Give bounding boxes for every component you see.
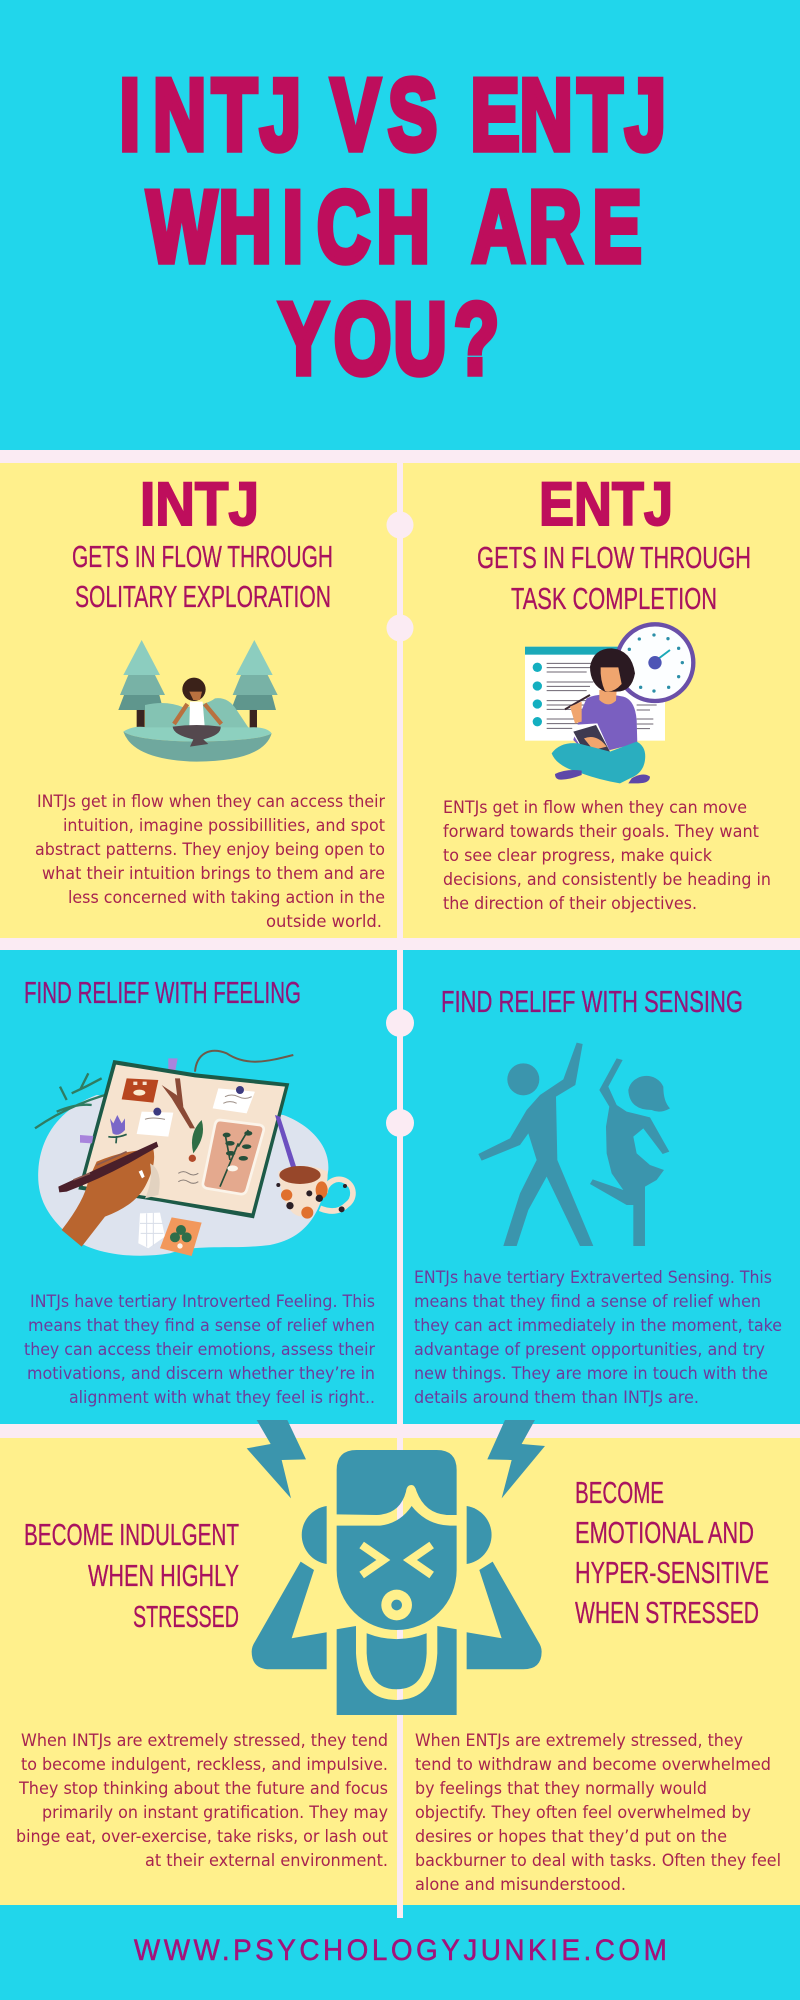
body text: ENTJ relief <box>414 1268 782 1407</box>
heading: INTJ: INTJ <box>140 470 259 538</box>
center divider with dots <box>386 450 414 1918</box>
body text: ENTJ flow: ENTJs get in flow when they can move <box>443 798 747 817</box>
illustration: journal, hand and mug <box>35 1051 353 1256</box>
body text: INTJ relief <box>24 1292 375 1407</box>
icon: stressed person with lightning bolts <box>247 1420 545 1715</box>
body text: ENTJ stress: backburner to deal with tasks. Often they feel <box>415 1851 781 1870</box>
header background <box>0 0 800 450</box>
body text: INTJ flow: abstract patterns. They enjoy being open to <box>35 840 385 859</box>
title: WHICH ARE <box>147 170 642 283</box>
body text: INTJ stress: binge eat, over-exercise, take risks, or lash out <box>16 1827 389 1846</box>
body text: INTJ flow: what their intuition brings to them and are <box>42 864 385 883</box>
title: INTJ VS ENTJ <box>120 58 666 171</box>
body text: ENTJ stress: by feelings that they normally would <box>415 1779 707 1798</box>
panel: gets in flow <box>0 450 800 950</box>
icon: meditating person among trees <box>118 640 278 762</box>
footer background <box>0 1905 800 2000</box>
body text: ENTJ stress: When ENTJs are extremely stressed, they <box>415 1731 743 1750</box>
body text: INTJ relief: they can access their emotions, assess their <box>24 1340 375 1359</box>
body text: ENTJ relief: means that they find a sense of relief when <box>414 1292 761 1311</box>
subheading: INTJ flow: GETS IN FLOW THROUGH <box>72 539 333 574</box>
body text: ENTJ flow <box>443 798 771 913</box>
subheading: INTJ flow: SOLITARY EXPLORATION <box>75 579 331 614</box>
body text: ENTJ flow: decisions, and consistently be heading in <box>443 870 771 889</box>
panel: find relief <box>0 950 800 1424</box>
body text: INTJ flow: INTJs get in flow when they can access their <box>37 792 385 811</box>
panel: stress <box>0 1424 800 1905</box>
body text: ENTJ relief: new things. They are more in touch with the <box>414 1364 768 1383</box>
body text: ENTJ stress: tend to withdraw and become overwhelmed <box>415 1755 771 1774</box>
body text: INTJ relief: INTJs have tertiary Introverted Feeling. This <box>30 1292 375 1311</box>
footer website url: WWW.PSYCHOLOGYJUNKIE.COM <box>134 1934 667 1967</box>
title: YOU? <box>279 282 499 395</box>
body text: INTJ relief: means that they find a sense of relief when <box>28 1316 375 1335</box>
heading: become indulgent: BECOME INDULGENT <box>24 1517 239 1552</box>
body text: INTJ stress: primarily on instant gratification. They may <box>42 1803 388 1822</box>
body text: INTJ flow: outside world. <box>266 912 382 931</box>
icon: person with checklist and clock <box>525 624 693 783</box>
body text: INTJ flow <box>35 792 386 931</box>
body text: ENTJ stress: alone and misunderstood. <box>415 1875 626 1894</box>
heading: become emotional <box>575 1475 769 1630</box>
body text: INTJ relief: alignment with what they feel is right.. <box>69 1388 375 1407</box>
body text: ENTJ relief: details around them than INTJs are. <box>414 1388 699 1407</box>
body text: ENTJ flow: the direction of their objectives. <box>443 894 697 913</box>
body text: ENTJ flow: forward towards their goals. They want <box>443 822 760 841</box>
subheading: ENTJ flow <box>477 540 751 616</box>
subheading: ENTJ flow: TASK COMPLETION <box>511 581 717 616</box>
body text: INTJ stress: at their external environment. <box>145 1851 388 1870</box>
body text: ENTJ stress: objectify. They often feel overwhelmed by <box>415 1803 751 1822</box>
title <box>120 58 666 395</box>
icon: dancing couple <box>478 1043 670 1246</box>
body text: INTJ stress: to become indulgent, reckless, and impulsive. <box>21 1755 388 1774</box>
body text: INTJ stress: When INTJs are extremely stressed, they tend <box>21 1731 388 1750</box>
body text: INTJ stress: They stop thinking about the future and focus <box>18 1779 388 1798</box>
heading: become emotional: BECOME <box>575 1475 664 1510</box>
subheading: INTJ flow <box>72 539 333 614</box>
body text: ENTJ flow: to see clear progress, make quick <box>443 846 712 865</box>
body text: ENTJ relief: they can act immediately in the moment, take <box>414 1316 782 1335</box>
body text: ENTJ stress <box>415 1731 781 1894</box>
body text: INTJ flow: intuition, imagine possibillities, and spot <box>63 816 386 835</box>
body text: ENTJ stress: desires or hopes that they’d put on the <box>415 1827 727 1846</box>
body text: INTJ stress <box>16 1731 389 1870</box>
body text: INTJ relief: motivations, and discern whether they’re in <box>27 1364 375 1383</box>
heading: become indulgent <box>24 1517 239 1634</box>
heading: become indulgent: STRESSED <box>133 1599 239 1634</box>
heading: ENTJ: ENTJ <box>539 470 673 538</box>
body text: ENTJ relief: advantage of present opportunities, and try <box>414 1340 765 1359</box>
heading: become indulgent: WHEN HIGHLY <box>88 1558 239 1593</box>
body text: INTJ flow: less concerned with taking action in the <box>68 888 385 907</box>
body text: ENTJ relief: ENTJs have tertiary Extraverted Sensing. This <box>414 1268 772 1287</box>
heading: find relief with feeling: FIND RELIEF WITH FEELING <box>24 975 301 1010</box>
